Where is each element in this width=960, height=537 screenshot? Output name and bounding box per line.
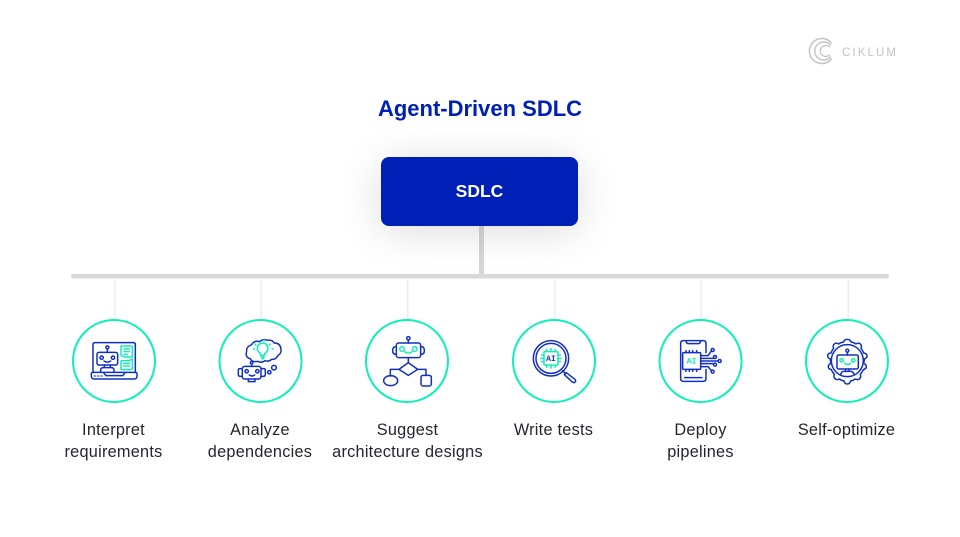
top box: SDLC: SDLC xyxy=(456,181,503,201)
label: interpret requirements: Interpret xyxy=(82,421,145,439)
top box: SDLC xyxy=(381,157,578,226)
label: analyze dependencies: dependencies xyxy=(208,443,312,461)
label: deploy pipelines: pipelines xyxy=(667,443,734,461)
logo: Ciklum xyxy=(808,38,898,64)
label: self-optimize: Self-optimize xyxy=(798,421,895,439)
label: deploy pipelines xyxy=(667,421,734,461)
icon: magnifier over AI chip: AI xyxy=(546,355,556,364)
icon: phone with AI chip: AI xyxy=(687,357,697,367)
label: write tests: Write tests xyxy=(514,421,593,439)
label: deploy pipelines: Deploy xyxy=(674,421,727,439)
label: analyze dependencies xyxy=(208,421,312,461)
title: Agent-Driven SDLC xyxy=(378,96,582,121)
label: suggest architecture designs: architecture designs xyxy=(332,443,483,461)
label: interpret requirements xyxy=(64,421,163,461)
label: suggest architecture designs: Suggest xyxy=(377,421,438,439)
label: analyze dependencies: Analyze xyxy=(230,421,290,439)
label: interpret requirements: requirements xyxy=(64,443,163,461)
label: suggest architecture designs xyxy=(332,421,483,461)
logo: Ciklum: CIKLUM xyxy=(842,47,898,59)
